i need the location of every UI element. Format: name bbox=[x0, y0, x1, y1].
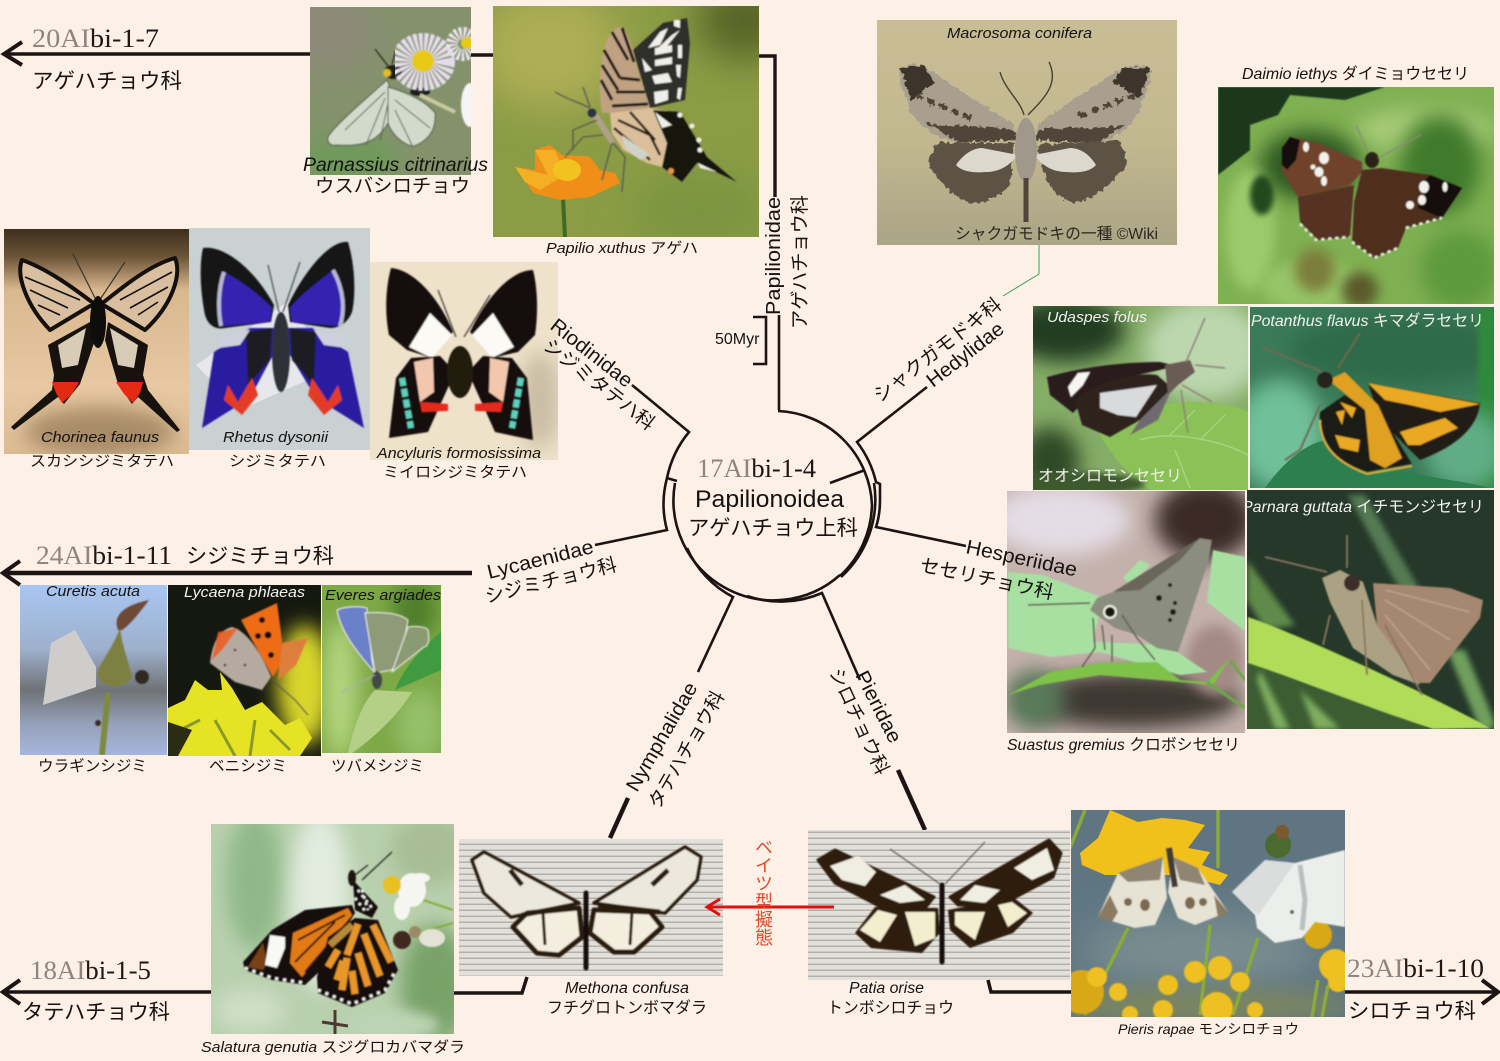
family label: 24 AI bi-1-11 Lycaenidae: シジミチョウ科 bbox=[186, 545, 334, 568]
family label: 23 AI bi-1-10 Pieridae: 23AIbi-1-10 bbox=[1347, 954, 1484, 983]
caption: Patia orise: Patia orise bbox=[849, 980, 924, 997]
species name: Everes argiades bbox=[325, 587, 442, 604]
branch label: Pieridae: シロチョウ科 bbox=[824, 665, 893, 778]
panel: Chorinea faunus photo bbox=[4, 229, 189, 457]
panel: Salatura genutia photo bbox=[211, 810, 470, 1045]
branch label: Lycaenidae: シジミチョウ科 bbox=[483, 554, 619, 608]
branch line: Papilionidae connecting to photos and 20 AI bi-1-7 arrow bbox=[3, 42, 775, 197]
caption: Patia orise bbox=[827, 980, 954, 1017]
branch label: Papilionidae bbox=[763, 195, 811, 329]
arrow: Nymphalidae to left bbox=[3, 977, 527, 1004]
family label: 24 AI bi-1-11 Lycaenidae bbox=[36, 541, 334, 570]
grey skipper butterfly bbox=[1028, 538, 1212, 667]
species name: Curetis acuta bbox=[46, 583, 140, 600]
family label: 20 AI bi-1-7 Papilionidae: 20AIbi-1-7 bbox=[32, 24, 159, 53]
caption: Pieris rapae: Pieris rapae モンシロチョウ bbox=[1118, 1021, 1299, 1037]
panel: Pieris rapae photo bbox=[1050, 810, 1351, 1024]
panel: Macrosoma conifera photo bbox=[877, 20, 1177, 245]
caption: Patia orise: トンボシロチョウ bbox=[827, 999, 954, 1017]
caption: Chorinea Japanese name: スカシシジミタテハ bbox=[30, 453, 174, 470]
panel: Lycaena phlaeas photo bbox=[168, 584, 333, 756]
captions: Udaspes folus bbox=[1047, 309, 1148, 326]
caption: Ancyluris: ミイロシジミタテハ bbox=[383, 464, 527, 481]
blurred yellow flowers bbox=[1060, 921, 1351, 1024]
blue butterfly bbox=[337, 607, 429, 692]
moth bbox=[899, 62, 1151, 222]
caption: Methona confusa: フチグロトンボマダラ bbox=[547, 999, 707, 1017]
branch label: Hesperiidae: Hesperiidae bbox=[964, 536, 1079, 581]
red and black butterfly bbox=[386, 268, 537, 440]
monarch-like butterfly bbox=[243, 852, 398, 1007]
golden skipper butterfly bbox=[1262, 333, 1480, 474]
panel: Ancyluris formosissima photo bbox=[370, 262, 560, 460]
panel: Daimio tethys photo bbox=[1218, 87, 1500, 310]
scale bar: 50 Myr bbox=[715, 317, 766, 364]
panel: Patia orise photo bbox=[808, 830, 1070, 980]
caption: Rhetus Japanese name: シジミタテハ bbox=[229, 453, 326, 470]
orange flower bbox=[515, 145, 620, 237]
panel: Papilio xuthus photo bbox=[493, 6, 759, 237]
family label: 24 AI bi-1-11 Lycaenidae: 24AIbi-1-11 bbox=[36, 541, 172, 570]
blue butterfly bbox=[201, 242, 364, 428]
family label: 18 AI bi-1-5 Nymphalidae: 18AIbi-1-5 bbox=[30, 956, 151, 985]
branch label: Lycaenidae: Lycaenidae bbox=[485, 536, 596, 584]
plant bud and stem bbox=[95, 600, 149, 755]
branch label: Pieridae: Pieridae bbox=[851, 667, 906, 747]
family label: 18 AI bi-1-5 Nymphalidae bbox=[22, 956, 170, 1024]
glasswing butterfly bbox=[472, 847, 701, 968]
skipper butterfly bbox=[1047, 318, 1225, 437]
caption: Methona confusa: Methona confusa bbox=[565, 980, 689, 997]
caption: Parnara guttata イチモンジセセリ bbox=[1242, 499, 1484, 516]
panel: Curetis acuta photo bbox=[20, 583, 167, 755]
red arrow: Batesian mimicry bbox=[707, 899, 834, 915]
center label: Papilionoidea: アゲハチョウ上科 bbox=[688, 517, 858, 540]
caption: Ancyluris: Ancyluris formosissima bbox=[376, 445, 541, 462]
branch label: Riodinidae: Riodinidae bbox=[546, 315, 637, 392]
stems bbox=[1070, 810, 1328, 1017]
caption: Lycaenidae species: ツバメシジミ bbox=[331, 758, 424, 775]
bud bbox=[1265, 825, 1291, 858]
caption: Parnassius citrinarius bbox=[303, 155, 488, 197]
green connector from moth photo to Hedylidae bbox=[1003, 245, 1039, 296]
branch label: Hesperiidae: セセリチョウ科 bbox=[918, 554, 1056, 604]
species name: Chorinea faunus bbox=[41, 429, 160, 446]
panel: Rhetus dysonii photo bbox=[189, 228, 370, 450]
center label: Papilionoidea bbox=[688, 454, 858, 540]
branch label: Hedylidae: Hedylidae bbox=[923, 318, 1009, 392]
species name: Lycaena phlaeas bbox=[184, 584, 306, 601]
caption: Lycaenidae species bbox=[38, 757, 424, 775]
family label: 23 AI bi-1-10 Pieridae bbox=[1347, 954, 1484, 1023]
panel: Parnassius citrinarius photo bbox=[310, 7, 471, 175]
yellow coreopsis flower bbox=[1080, 810, 1228, 885]
branch label: Nymphalidae: タテハチョウ科 bbox=[644, 687, 729, 812]
caption: Parnassius citrinarius: ウスバシロチョウ bbox=[315, 176, 470, 197]
family label: 18 AI bi-1-5 Nymphalidae: タテハチョウ科 bbox=[22, 1001, 170, 1024]
lower branch segments bbox=[610, 770, 925, 838]
caption: Papilio xuthus: Papilio xuthus アゲハ bbox=[546, 240, 698, 257]
species name: Rhetus dysonii bbox=[223, 429, 329, 446]
caption: Ancyluris bbox=[376, 445, 541, 481]
caption: Lycaenidae species: ベニシジミ bbox=[209, 758, 287, 775]
center label: Papilionoidea: Papilionoidea bbox=[695, 486, 845, 513]
cabbage white butterflies bbox=[1098, 848, 1345, 943]
caption: Potanthus flavus キマダラセセリ bbox=[1251, 312, 1484, 330]
skipper butterfly bbox=[1282, 125, 1462, 258]
panel: Suastus gremius photo bbox=[1007, 491, 1245, 733]
panel: Parnara guttata photo bbox=[1242, 490, 1494, 729]
arrow: Lycaenidae to left bbox=[3, 561, 472, 585]
daisy flowers bbox=[403, 33, 479, 127]
moth caption: Macrosoma conifera bbox=[947, 25, 1092, 42]
yellow flowers bbox=[168, 672, 312, 756]
phylogeny tree: central circular tree bbox=[595, 315, 966, 680]
vertical label: Batesian mimicry: ベイツ型擬態 bbox=[753, 838, 773, 946]
family label: 20 AI bi-1-7 Papilionidae bbox=[32, 24, 182, 93]
family label: 23 AI bi-1-10 Pieridae: シロチョウ科 bbox=[1348, 1000, 1476, 1023]
panel: Udaspes folus photo bbox=[1033, 306, 1248, 490]
panel: Methona confusa photo bbox=[459, 839, 723, 976]
branch label: Riodinidae: シジミタテハ科 bbox=[539, 335, 659, 435]
branch label: Hedylidae: シャクガモドキ科 bbox=[870, 294, 1006, 407]
moth caption: シャクガモドキの一種 ©Wiki bbox=[955, 225, 1158, 243]
caption: Lycaenidae species: ウラギンシジミ bbox=[38, 757, 147, 775]
twig bbox=[322, 1010, 348, 1034]
branch label: Papilionidae: アゲハチョウ科 bbox=[789, 195, 811, 329]
caption: Salatura genutia: Salatura genutia スジグロカバマダラ bbox=[201, 1039, 465, 1056]
captions: オオシロモンセセリ bbox=[1038, 468, 1182, 485]
branch label: Hesperiidae bbox=[918, 536, 1079, 604]
captions bbox=[1038, 309, 1182, 485]
center label: Papilionoidea: 17AIbi-1-4 bbox=[697, 454, 816, 483]
panel: Everes argiades photo bbox=[322, 580, 444, 760]
clearwing butterfly bbox=[11, 254, 180, 432]
caption: Suastus gremius: Suastus gremius クロボシセセリ bbox=[1007, 736, 1240, 754]
branch label: Nymphalidae: Nymphalidae bbox=[622, 679, 702, 796]
silver wing bbox=[43, 630, 96, 705]
branch label: Papilionidae: Papilionidae bbox=[763, 197, 785, 315]
caption: Methona confusa bbox=[547, 980, 707, 1017]
tan skipper butterfly bbox=[1265, 535, 1483, 695]
moth caption bbox=[947, 25, 1158, 243]
white flowers bbox=[383, 873, 453, 949]
small copper butterfly bbox=[210, 603, 308, 715]
scale bar: 50 Myr: 50Myr bbox=[715, 331, 760, 348]
caption: Parnassius citrinarius: Parnassius citrinarius bbox=[303, 155, 488, 176]
family label: 20 AI bi-1-7 Papilionidae: アゲハチョウ科 bbox=[32, 70, 182, 93]
swallowtail butterfly bbox=[555, 18, 737, 192]
butterfly wings bbox=[328, 49, 455, 146]
green leaves bbox=[1008, 550, 1245, 708]
mimic butterfly bbox=[818, 840, 1061, 962]
panel: Potanthus flavus photo bbox=[1235, 307, 1500, 490]
branch: Pieridae to right arrow bbox=[988, 980, 1498, 1004]
caption: Daimio iethys: Daimio iethys ダイミョウセセリ bbox=[1242, 65, 1469, 83]
